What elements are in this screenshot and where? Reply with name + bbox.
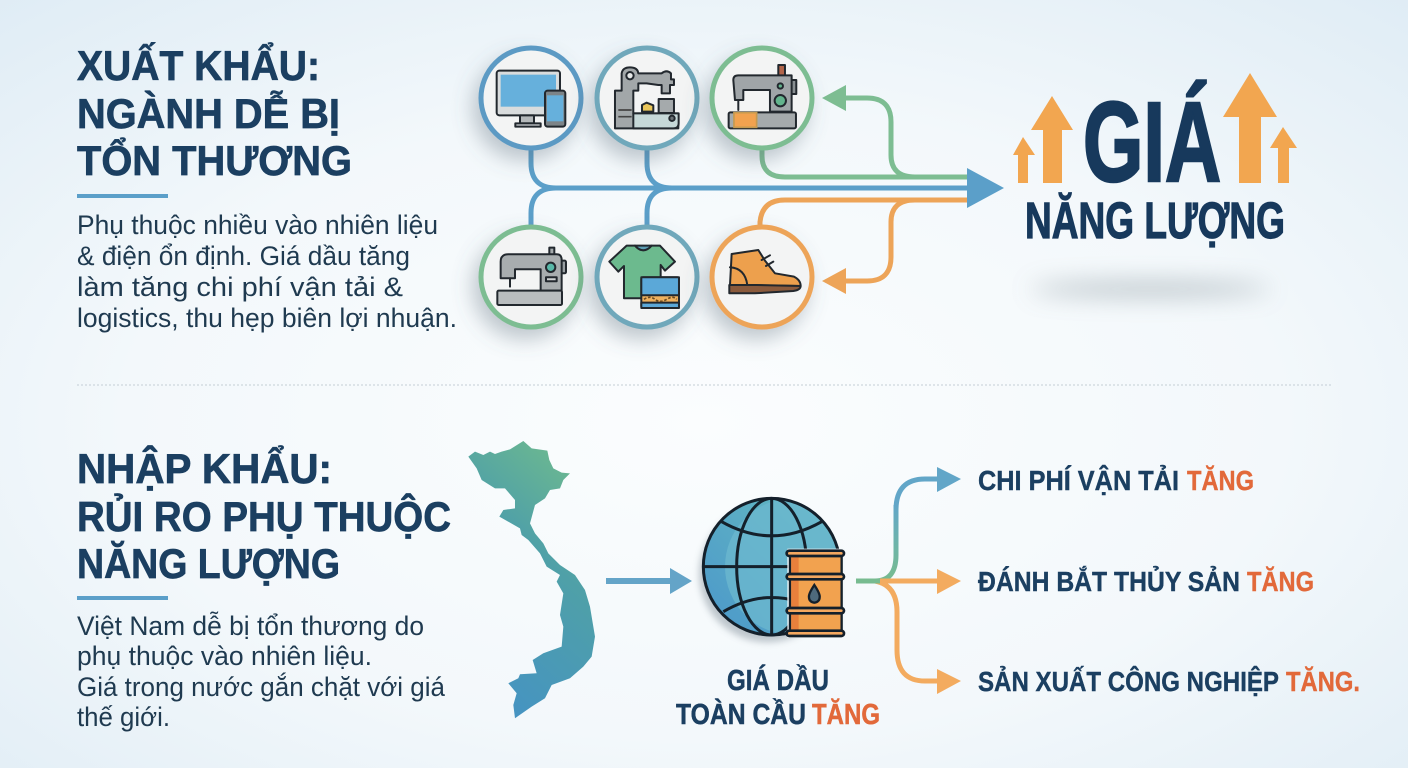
text block: import description: Giá trong nước gắn chặt với giá xyxy=(77,672,445,702)
icon: globe with oil barrel xyxy=(699,498,862,642)
label: global oil price: TĂNG xyxy=(812,698,880,731)
icon: factory machine xyxy=(597,48,697,148)
arrow: map to globe xyxy=(606,568,692,594)
heading: export: TỔN THƯƠNG xyxy=(77,135,352,184)
icon: oil barrel xyxy=(787,549,845,638)
icon: up arrow 2 xyxy=(1031,96,1073,183)
icon: small up arrow 1 xyxy=(1013,137,1035,183)
heading underline xyxy=(77,596,168,600)
label: fishing cost: TĂNG xyxy=(1247,566,1314,597)
label: global oil price: GIÁ DẦU xyxy=(727,663,829,697)
connectors: industries to energy price xyxy=(531,98,975,281)
heading: import: RỦI RO PHỤ THUỘC xyxy=(77,492,451,540)
label: global oil price xyxy=(676,663,880,731)
icon: boot xyxy=(712,227,812,327)
shadow under title xyxy=(1030,282,1270,296)
panel: energy price xyxy=(1013,73,1297,296)
heading: export xyxy=(77,41,352,184)
text block: export description: & điện ổn định. Giá dầu tăng xyxy=(77,241,410,271)
arrow: transport xyxy=(937,467,961,492)
label: industrial cost: SẢN XUẤT CÔNG NGHIỆP xyxy=(978,665,1279,697)
heading: import xyxy=(77,444,451,587)
arrow: fishing xyxy=(937,569,961,594)
text block: export description: logistics, thu hẹp biên lợi nhuận. xyxy=(77,303,457,333)
text block: import description xyxy=(77,611,445,732)
title: GIÁ: GIÁ xyxy=(1083,79,1221,205)
arrow: industry xyxy=(937,669,961,694)
panel: import xyxy=(77,441,1360,732)
icon: up arrow 3 xyxy=(1223,73,1277,183)
arrow: orange return xyxy=(822,268,846,294)
arrow: main to energy price xyxy=(967,168,1004,208)
label: fishing cost: ĐÁNH BẮT THỦY SẢN xyxy=(978,565,1240,597)
arrow: green return xyxy=(822,85,846,111)
label: industrial cost: TĂNG. xyxy=(1286,666,1360,697)
icon: small up arrow 4 xyxy=(1270,127,1297,183)
heading: import: NHẬP KHẨU: xyxy=(77,444,332,492)
title: NĂNG LƯỢNG: NĂNG LƯỢNG xyxy=(1025,192,1285,249)
heading: export: NGÀNH DỄ BỊ xyxy=(77,89,340,137)
label: transport cost: CHI PHÍ VẬN TẢI xyxy=(978,464,1179,496)
heading underline xyxy=(77,194,168,198)
connectors: oil price branches xyxy=(856,479,942,681)
heading: export: XUẤT KHẨU: xyxy=(77,41,320,89)
text block: import description: thế giới. xyxy=(77,702,170,732)
label: global oil price: TOÀN CẦU xyxy=(676,697,806,731)
text block: import description: phụ thuộc vào nhiên liệu. xyxy=(77,641,372,671)
label: transport cost: TĂNG xyxy=(1187,465,1254,496)
icon: sewing machine xyxy=(481,227,581,327)
text block: import description: Việt Nam dễ bị tổn thương do xyxy=(77,611,424,641)
text block: export description: Phụ thuộc nhiều vào nhiên liệu xyxy=(77,210,438,240)
icon: t-shirt and fabric xyxy=(597,227,697,327)
text block: export description xyxy=(77,210,457,333)
text block: export description: làm tăng chi phí vận tải & xyxy=(77,272,403,302)
panel: export xyxy=(77,41,1004,333)
icon: electronics xyxy=(481,48,581,148)
icon: sewing machine with fabric xyxy=(712,48,812,148)
heading: import: NĂNG LƯỢNG xyxy=(77,540,340,587)
map: Vietnam xyxy=(468,441,595,718)
